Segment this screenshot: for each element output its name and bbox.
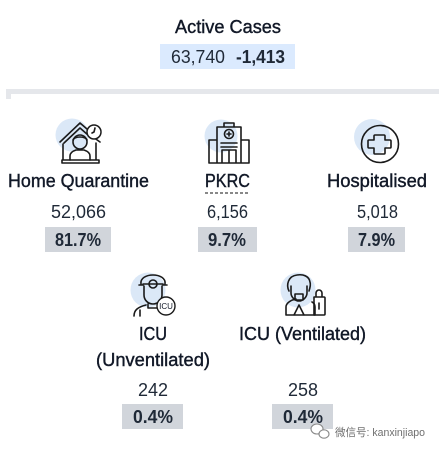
icon: medical cross in circle [354, 119, 398, 162]
watermark: 微信号: kanxinjiapo [335, 425, 425, 439]
label: Hospitalised [327, 171, 427, 191]
panel: hospitalised [327, 119, 427, 252]
percentage [272, 404, 333, 429]
label: ICU [139, 324, 167, 344]
panel: ICU unventilated [96, 272, 210, 429]
divider bracket [6, 89, 439, 99]
icon: hospital building [204, 120, 249, 163]
label: ICU (Ventilated) [239, 324, 366, 344]
active cases total and change: -1,413 [236, 47, 285, 67]
icon: doctor with ICU badge: ICU [159, 302, 173, 311]
watermark [311, 424, 425, 439]
title: Active Cases [175, 17, 281, 37]
label: Home Quarantine [8, 171, 149, 191]
count: 242 [138, 380, 168, 400]
count: 6,156 [207, 202, 248, 222]
icon: doctor with ICU badge [130, 272, 175, 316]
percentage [45, 227, 111, 252]
panel: PKRC [198, 120, 257, 252]
active cases total and change [160, 44, 295, 69]
count: 5,018 [357, 202, 398, 222]
icon: wechat bubbles [311, 424, 329, 438]
panel: home quarantine [8, 118, 149, 252]
panel: ICU ventilated [239, 272, 366, 429]
active cases total and change: 63,740 [171, 47, 225, 67]
icon: patient with oxygen tank [280, 272, 325, 315]
panel: ICU unventilated: (Unventilated) [96, 350, 210, 370]
dashed underline [205, 192, 250, 194]
label: PKRC [205, 171, 250, 191]
percentage: 0.4% [133, 407, 173, 427]
count: 258 [288, 380, 318, 400]
percentage [122, 404, 183, 429]
count: 52,066 [51, 202, 106, 222]
percentage: 9.7% [208, 230, 246, 250]
percentage: 7.9% [358, 230, 395, 250]
percentage: 81.7% [55, 230, 101, 250]
icon: house with person and clock [56, 118, 101, 163]
percentage: 0.4% [283, 407, 323, 427]
